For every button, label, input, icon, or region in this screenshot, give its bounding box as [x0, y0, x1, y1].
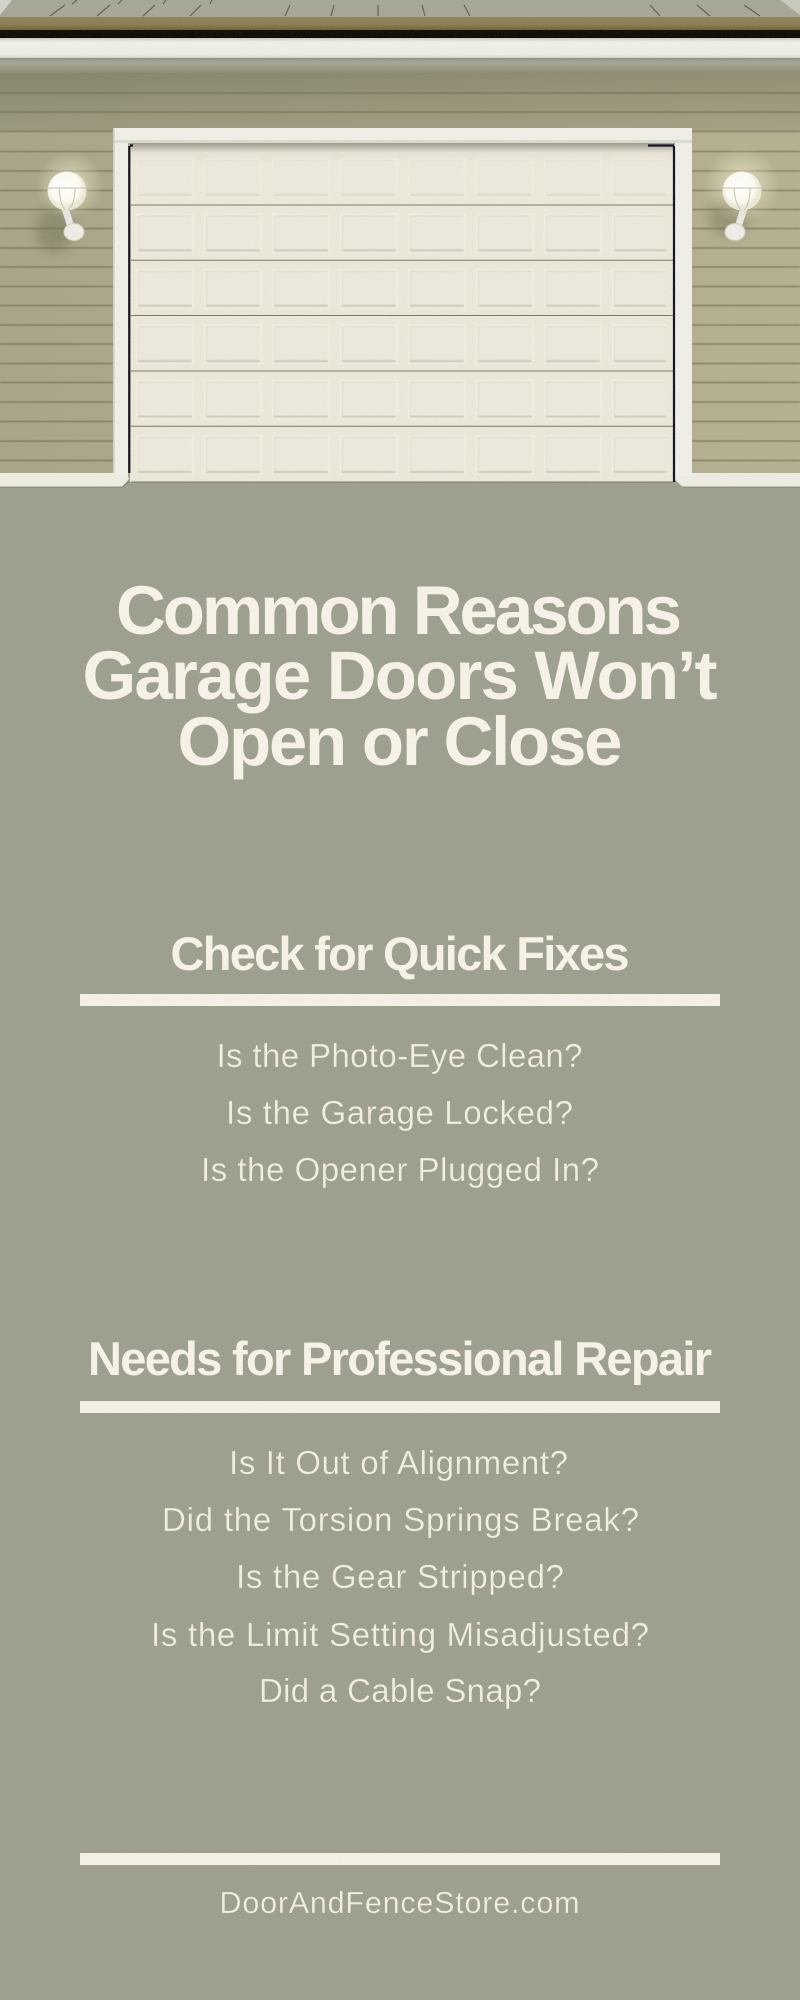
section: quick fixes [80, 927, 720, 1188]
list: professional repair: Did a Cable Snap? [259, 1672, 541, 1709]
garage door [129, 143, 675, 482]
title: Open or Close [178, 703, 622, 780]
white gutter [0, 38, 800, 58]
heading: professional repair: Needs for Professional Repair [88, 1332, 712, 1385]
right wall lamp [704, 147, 780, 240]
list: professional repair: Is It Out of Alignment? [229, 1444, 568, 1481]
list: professional repair [151, 1444, 649, 1709]
list: quick fixes: Is the Opener Plugged In? [201, 1151, 599, 1188]
garage scene photo [0, 0, 800, 487]
door section seams [131, 205, 673, 482]
website url: DoorAndFenceStore.com [220, 1886, 580, 1920]
door raised panels [136, 158, 666, 478]
soffit [0, 58, 800, 73]
left base trim [0, 473, 129, 487]
title [82, 572, 718, 780]
title: Garage Doors Won’t [82, 637, 718, 714]
list: quick fixes: Is the Garage Locked? [226, 1094, 573, 1131]
right base trim [675, 473, 800, 487]
list: quick fixes [201, 1037, 599, 1188]
list: professional repair: Is the Gear Stripped? [236, 1558, 564, 1595]
section: professional repair [80, 1332, 720, 1709]
shadow gap [0, 30, 800, 38]
fascia board [0, 17, 800, 30]
rule [80, 994, 720, 1006]
title: Common Reasons [116, 572, 682, 649]
roof shingles [0, 0, 800, 17]
list: professional repair: Is the Limit Setting Misadjusted? [151, 1616, 649, 1653]
siding courses [0, 93, 800, 460]
siding wall [0, 73, 800, 475]
list: quick fixes: Is the Photo-Eye Clean? [216, 1037, 582, 1074]
rule [80, 1401, 720, 1413]
heading: quick fixes: Check for Quick Fixes [170, 927, 630, 980]
left wall lamp [36, 151, 104, 252]
door side shadows [129, 146, 674, 482]
top row fade [131, 152, 673, 204]
list: professional repair: Did the Torsion Springs Break? [162, 1501, 639, 1538]
footer [80, 1853, 720, 1920]
door trim frame [113, 128, 692, 478]
footer rule [80, 1853, 720, 1865]
base shadow [0, 482, 800, 487]
